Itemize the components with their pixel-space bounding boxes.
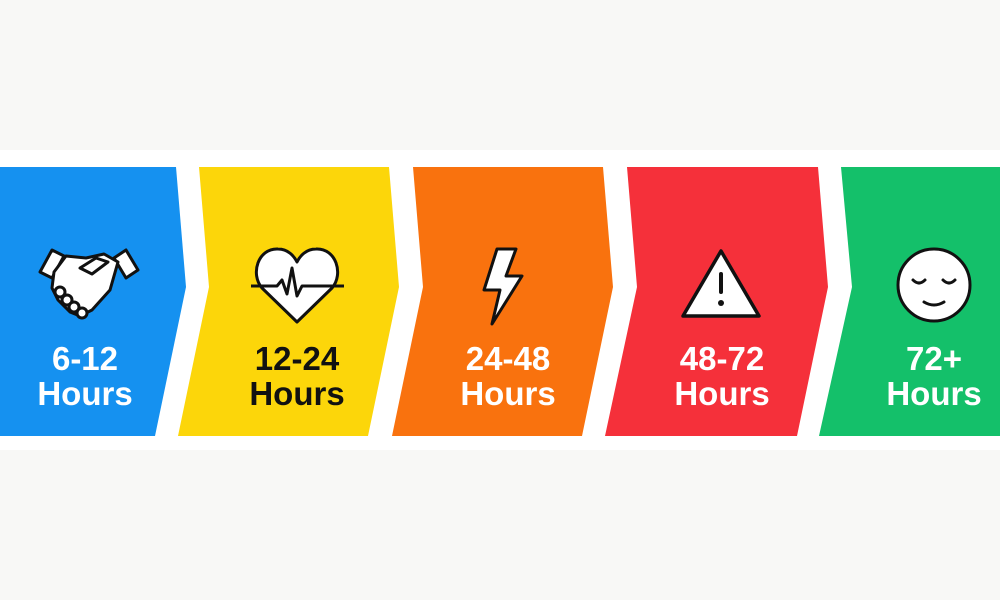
panel: 24-48 hours: Hours: [460, 375, 556, 412]
text: 12-24 hours: 12-24: [255, 340, 340, 377]
panel: 6-12 hours: [0, 167, 186, 436]
text: 48-72 hours: 48-72: [680, 340, 764, 377]
panel: 72+ hours: Hours: [886, 375, 982, 412]
icon: lightning bolt: [484, 249, 522, 324]
text: 24-48 hours: 24-48: [466, 340, 550, 377]
panel: 12-24 hours: Hours: [249, 375, 345, 412]
text: 6-12 hours: 6-12: [52, 340, 118, 377]
icon: calm face: [898, 249, 970, 321]
panel: 72+ hours: [819, 167, 1000, 436]
text: 72+ hours: 72+: [906, 340, 962, 377]
icon: warning triangle: [683, 251, 759, 316]
panel: 48-72 hours: Hours: [674, 375, 770, 412]
icon: heart with pulse: [251, 249, 344, 322]
panel: 6-12 hours: Hours: [37, 375, 133, 412]
icon: handshake: [40, 250, 138, 318]
panel: 12-24 hours: [178, 167, 399, 436]
panel: 24-48 hours: [392, 167, 613, 436]
panel: 48-72 hours: [605, 167, 828, 436]
